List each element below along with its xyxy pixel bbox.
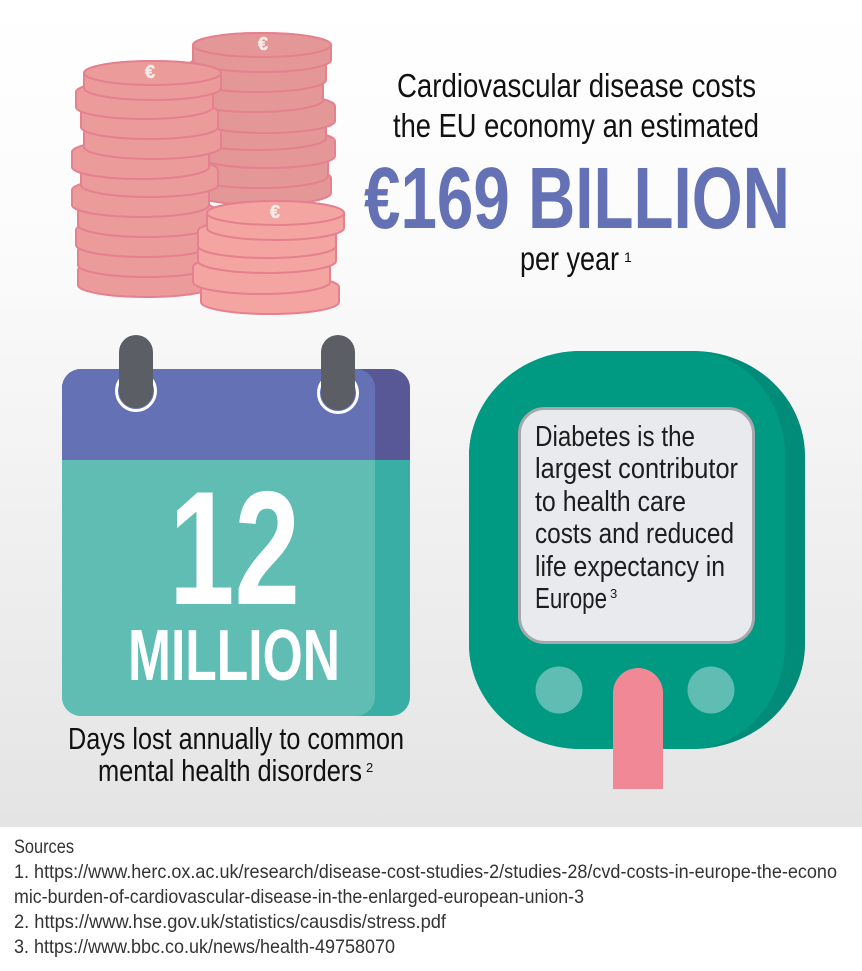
meter screen text: to health care [535, 486, 686, 518]
headline: cardiovascular disease costs: Cardiovascular disease costs [397, 67, 756, 104]
calendar shaded side [62, 369, 410, 716]
calendar header [62, 369, 375, 460]
back coin stack [186, 33, 335, 205]
euro symbols on coins: € [258, 34, 268, 54]
meter screen text [535, 421, 738, 615]
test strip [613, 668, 663, 789]
caption: days lost annually [68, 721, 404, 788]
icon: calendar [62, 335, 410, 716]
headline: cardiovascular disease costs: the EU economy an estimated [393, 107, 759, 144]
calendar body [62, 460, 375, 716]
sources text: 3. https://www.bbc.co.uk/news/health-49758070 [14, 936, 395, 958]
sources text [14, 836, 837, 958]
front coin stack [193, 201, 344, 314]
meter shaded side [469, 351, 805, 749]
icon: glucose meter [469, 351, 805, 789]
text: million: MILLION [128, 616, 340, 696]
meter screen text: 3 [610, 586, 617, 601]
caption: days lost annually: Days lost annually to common [68, 721, 404, 756]
text: per year: per year [520, 240, 619, 277]
caption: days lost annually: 2 [366, 760, 373, 775]
text: per year: 1 [624, 249, 632, 265]
sources panel [0, 827, 862, 971]
meter left button [536, 666, 582, 714]
meter screen text: Europe [535, 583, 607, 615]
sources text: 2. https://www.hse.gov.uk/statistics/causdis/stress.pdf [14, 911, 447, 933]
sources text: mic-burden-of-cardiovascular-disease-in-the-enlarged-european-union-3 [14, 886, 584, 908]
sources text: Sources [14, 836, 74, 858]
meter screen text: Diabetes is the [535, 421, 695, 453]
meter screen text: life expectancy in [535, 551, 725, 583]
meter screen text: costs and reduced [535, 518, 734, 550]
calendar binding rings [116, 335, 358, 412]
icon: stacks of euro coins [72, 33, 344, 314]
left coin stack [72, 61, 221, 297]
meter screen text: largest contributor [535, 453, 738, 485]
headline: cardiovascular disease costs [393, 67, 759, 144]
meter right button [688, 666, 734, 714]
euro symbols on coins [145, 34, 280, 222]
number: 12: 12 [169, 458, 300, 639]
euro symbols on coins: € [145, 62, 155, 82]
caption: days lost annually: mental health disorders [98, 753, 362, 788]
euro symbols on coins: € [270, 202, 280, 222]
meter screen [520, 408, 754, 642]
meter body [469, 351, 785, 749]
